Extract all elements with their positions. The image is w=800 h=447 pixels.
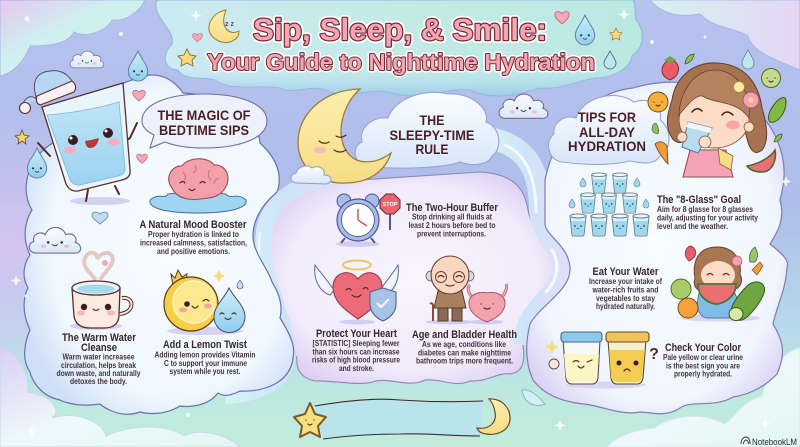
icon: two urine color cups: ? — [649, 346, 659, 363]
title — [207, 12, 595, 75]
text: protect your heart — [312, 328, 401, 373]
icon: grandpa and bladder — [426, 256, 507, 324]
text: eat your water: Increase your intake of — [589, 277, 662, 286]
panel: sleepy-time rule background — [268, 172, 556, 384]
text: age and bladder health: Age and Bladder Health — [412, 329, 517, 341]
icon: girl drinking water with fruit — [667, 63, 767, 177]
icon: star left — [15, 130, 29, 144]
text: the warm water cleanse: The Warm Water — [62, 332, 137, 344]
text: the two-hour buffer: prevent interruptions. — [417, 230, 486, 238]
text: protect your heart: Protect Your Heart — [316, 328, 397, 340]
icon: happy water glass with nightcap — [20, 71, 137, 205]
text: age and bladder health: diabetes can make nighttime — [418, 348, 512, 358]
icon: stack of eight glasses — [569, 173, 649, 236]
text: a natural mood booster — [140, 219, 247, 256]
text: the warm water cleanse: circulation, helps break — [61, 361, 137, 370]
icon: heart lower — [137, 154, 147, 163]
text: the two-hour buffer: least 2 hours before bed to — [408, 221, 496, 230]
text: add a lemon twist — [154, 339, 256, 376]
left ribbon of water — [225, 176, 345, 396]
icon: carrot — [655, 142, 668, 164]
text: add a lemon twist: system while you rest. — [170, 367, 240, 376]
icon: water splash — [522, 390, 545, 405]
icon: title moon — [209, 10, 239, 43]
decorative progress ribbon with star and moon — [294, 399, 510, 439]
title: Sip, Sleep, & Smile: — [253, 12, 547, 47]
text: a natural mood booster: increased calmness, satisfaction, — [140, 238, 247, 248]
icon: title moon: z z — [225, 21, 234, 28]
icon: lemon and drop — [164, 270, 245, 335]
text: eat your water: Eat Your Water — [592, 266, 659, 278]
text: a natural mood booster: and positive emotions. — [157, 247, 230, 256]
icon: heart upper — [133, 90, 145, 101]
icon: star — [294, 403, 326, 437]
heading bubble: the magic of bedtime sips: THE MAGIC OF — [158, 107, 251, 123]
text: add a lemon twist: Add a Lemon Twist — [163, 339, 247, 351]
heading cloud: tips for all-day hydration: HYDRATION — [568, 138, 646, 154]
icon: small cloud by moon — [291, 166, 331, 184]
text: the 8-glass goal: Aim for 8 glasse for 8 glasses — [657, 205, 754, 214]
icon: two urine color cups — [545, 332, 659, 388]
icon: lime — [762, 68, 780, 88]
icon: watermelon slice — [747, 150, 775, 172]
text: protect your heart: and stroke. — [339, 364, 374, 373]
text: age and bladder health: bathroom trips more frequent. — [416, 356, 513, 366]
text: the 8-glass goal — [657, 194, 759, 231]
icon: leaves and drop — [652, 50, 782, 142]
heading cloud: tips for all-day hydration — [548, 95, 669, 164]
text: a natural mood booster: Proper hydration is linked to — [148, 230, 239, 239]
icon: drop top — [128, 51, 148, 81]
text: the 8-glass goal: daily, adjusting for your activity — [657, 214, 759, 222]
icon: drop left — [27, 148, 47, 178]
title: Your Guide to Nighttime Hydration — [207, 49, 595, 75]
title: Your Guide to Nighttime Hydration — [207, 49, 595, 75]
heading cloud: the sleepy-time rule: RULE — [416, 141, 448, 157]
text: the two-hour buffer — [406, 202, 499, 238]
heading bubble: the magic of bedtime sips: BEDTIME SIPS — [159, 122, 249, 138]
text: check your color: Check Your Color — [665, 342, 742, 354]
text: add a lemon twist: C to support your immune — [164, 359, 248, 368]
icon: sleeping moon — [298, 89, 391, 183]
heading cloud: the sleepy-time rule — [355, 92, 499, 168]
text: the warm water cleanse: Warm water increasee — [62, 352, 135, 362]
title: Sip, Sleep, & Smile: — [253, 12, 547, 47]
text: a natural mood booster: A Natural Mood Booster — [140, 219, 247, 231]
text: check your color — [663, 342, 744, 378]
heading cloud: tips for all-day hydration: TIPS FOR — [578, 109, 636, 125]
icon: girl eating watermelon — [671, 246, 765, 322]
corner cloud: top right — [650, 0, 800, 70]
corner cloud: bottom right — [607, 348, 800, 447]
corner cloud: bottom left — [0, 346, 240, 447]
text: the warm water cleanse: Cleanse — [81, 342, 117, 354]
text: the two-hour buffer: Stop drinking all fluids at — [412, 212, 492, 222]
icon: title heart right — [555, 12, 569, 24]
heading cloud: tips for all-day hydration: ALL-DAY — [579, 124, 636, 140]
icon: alarm clock with stop sign — [336, 194, 400, 247]
heading cloud: the sleepy-time rule: SLEEPY-TIME — [390, 127, 474, 143]
icon: strawberry — [662, 56, 679, 80]
icon: orange — [648, 92, 668, 112]
text: the two-hour buffer: The Two-Hour Buffer — [406, 202, 499, 214]
text: age and bladder health: As we age, conditions like — [422, 340, 507, 349]
text: protect your heart: than six hours can increase — [312, 348, 400, 356]
icon: smiling cloud centre — [499, 94, 548, 118]
text: eat your water: vegetables to stay — [596, 294, 656, 303]
icon: alarm clock with stop sign: STOP — [383, 202, 398, 208]
panel: magic of bedtime sips background — [24, 75, 294, 414]
icon: title star — [178, 49, 196, 66]
icon: cucumber — [768, 98, 786, 122]
icon: blue heart — [92, 212, 108, 224]
icon: title star right — [610, 28, 622, 40]
text: eat your water: hydrated naturally. — [596, 302, 655, 311]
text: the warm water cleanse: down waste, and naturally — [56, 369, 141, 378]
title cloud — [156, 0, 642, 96]
text: add a lemon twist: Adding lemon provides Vitamin — [154, 350, 256, 360]
text: the 8-glass goal: The "8-Glass" Goal — [657, 194, 741, 206]
text: protect your heart: [STATISTIC] Sleeping fewer — [312, 339, 400, 348]
icon: smiling cloud top — [70, 51, 104, 68]
text: the warm water cleanse — [56, 332, 141, 386]
icon: smiling cloud lower left — [29, 227, 81, 253]
text: check your color: is the best sign you are — [666, 362, 741, 370]
text: check your color: Pale yellow or clear urine — [663, 353, 744, 362]
icon: winged heart with shield — [315, 260, 398, 324]
panel: all-day hydration background — [527, 82, 788, 414]
text: age and bladder health — [412, 329, 517, 366]
right ribbon of water — [488, 138, 563, 345]
text: protect your heart: risks of high blood pressure — [312, 356, 401, 364]
text: the warm water cleanse: detoxes the body. — [70, 377, 127, 386]
icon: warm water mug — [70, 253, 132, 330]
text: eat your water: water-rich fruits and — [592, 286, 659, 294]
text: the 8-glass goal: level and the weather. — [657, 222, 728, 231]
heading cloud: the sleepy-time rule: THE — [420, 112, 444, 128]
text: eat your water — [589, 266, 662, 311]
icon: title drop — [575, 15, 595, 45]
text: check your color: properly hydrated. — [674, 370, 732, 378]
corner cloud: top left — [0, 0, 145, 76]
icon: small moon — [477, 399, 510, 434]
icon: brain on water — [150, 159, 246, 213]
icon: small drop right — [604, 51, 616, 69]
icon: title heart left — [193, 33, 202, 42]
heading bubble: the magic of bedtime sips — [142, 94, 267, 148]
